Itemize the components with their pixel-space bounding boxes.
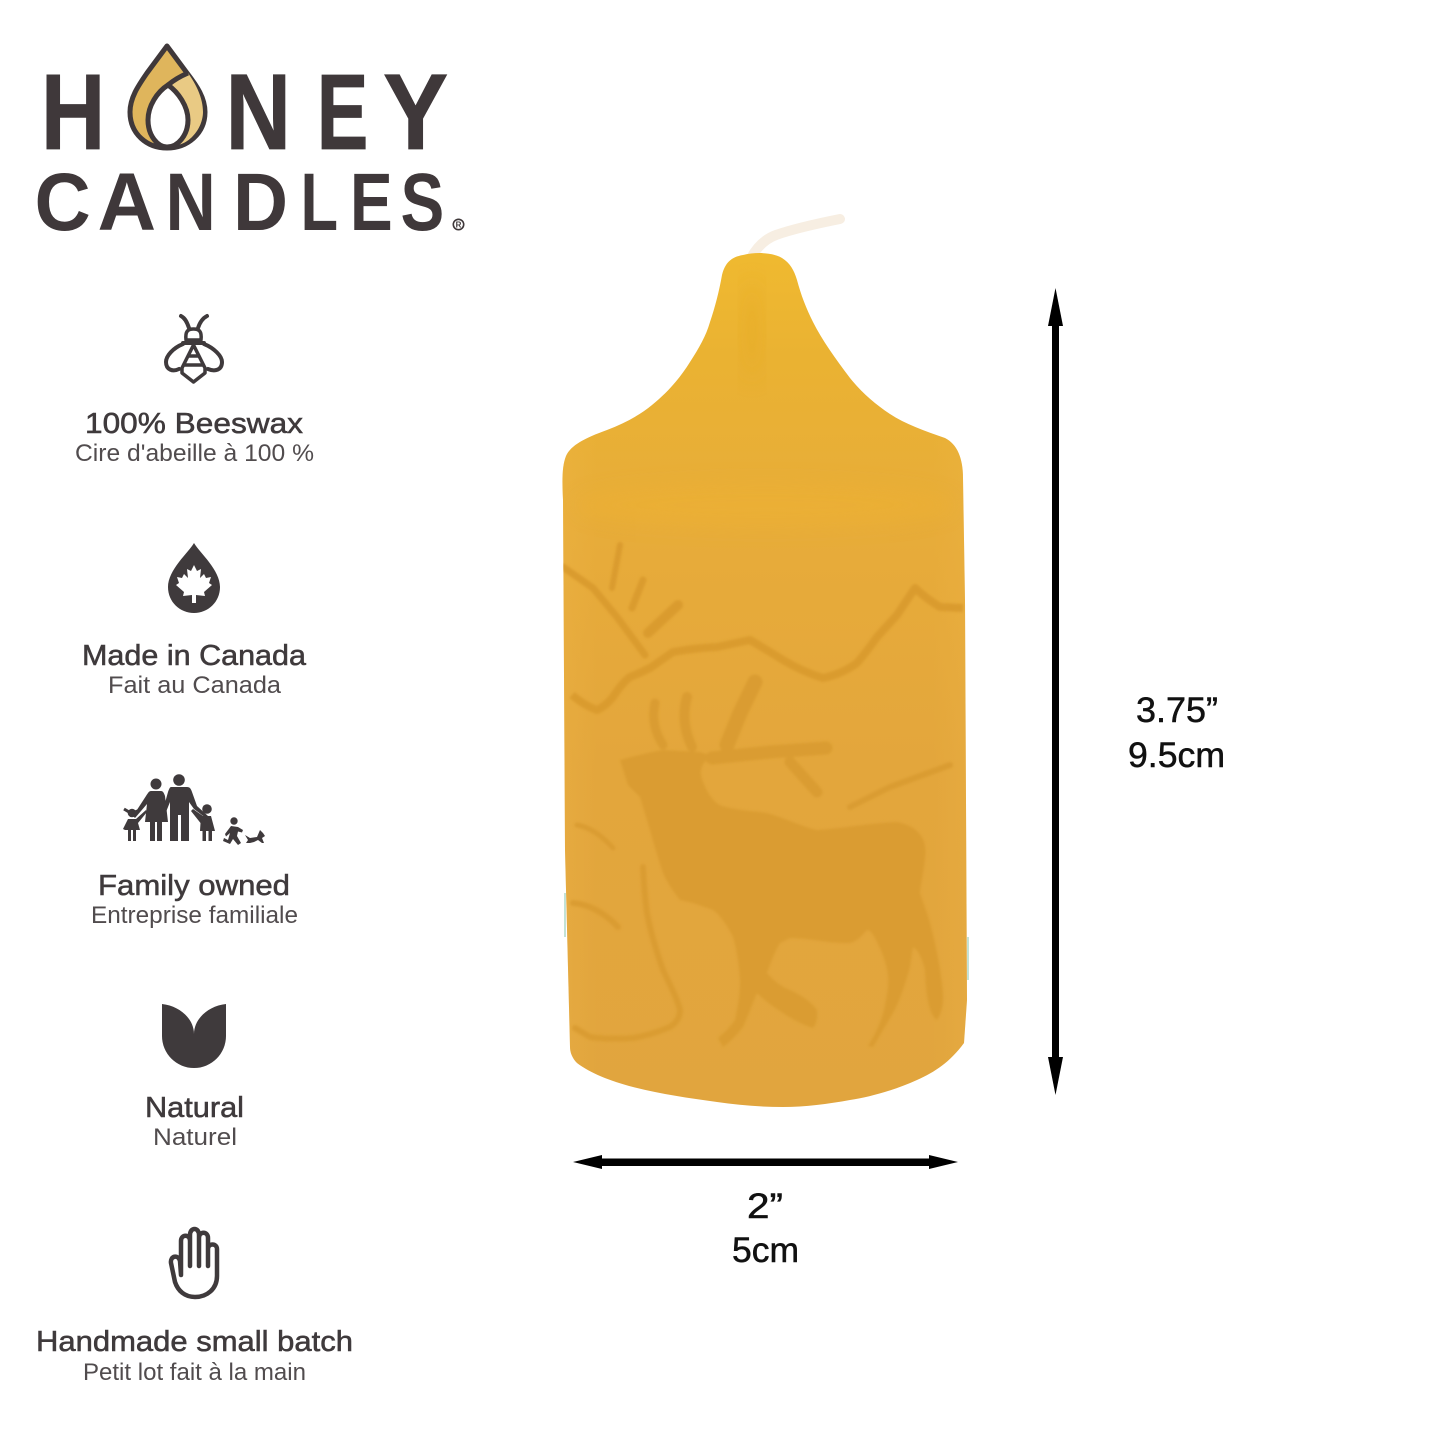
- feature: 100% Beeswax: [75, 316, 314, 467]
- icon: leaf: [162, 1004, 226, 1068]
- subheading: Cire d'abeille à 100 %: [75, 440, 314, 467]
- feature: Family owned: [91, 774, 298, 929]
- logo word: HONEY: H: [41, 52, 105, 172]
- label: width: [732, 1187, 799, 1270]
- logo word: HONEY: E: [317, 51, 368, 172]
- relief: pine branch: [563, 545, 678, 655]
- logo word: HONEY: Y: [383, 52, 448, 172]
- logo word: CANDLES: A: [98, 157, 156, 248]
- icon: hand: [171, 1229, 217, 1297]
- logo: Honey Candles: [34, 46, 464, 248]
- logo word: CANDLES: L: [300, 156, 338, 248]
- candle photo: [550, 219, 980, 1115]
- subheading: Fait au Canada: [108, 672, 282, 699]
- subheading: Petit lot fait à la main: [83, 1359, 306, 1386]
- label: width: 2”: [747, 1187, 783, 1226]
- arrow: height: [1048, 288, 1063, 1095]
- label: height: 9.5cm: [1128, 736, 1225, 775]
- logo word: CANDLES: C: [34, 156, 91, 247]
- feature: Made in Canada: [82, 543, 307, 699]
- relief: mountain ridge: [572, 588, 963, 710]
- heading: Made in Canada: [82, 640, 307, 672]
- registered mark: R: [456, 220, 462, 230]
- logo word: CANDLES: E: [350, 155, 393, 248]
- heading: Family owned: [98, 870, 290, 902]
- logo word: HONEY: N: [226, 53, 291, 173]
- label: width: 5cm: [732, 1231, 799, 1270]
- icon: drop with maple leaf: [168, 543, 220, 613]
- candle wax body: [550, 245, 980, 1115]
- subheading: Entreprise familiale: [91, 902, 298, 929]
- logo word: CANDLES: N: [166, 157, 216, 248]
- heading: Natural: [145, 1092, 244, 1124]
- label: height: 3.75”: [1136, 691, 1218, 730]
- icon: bee: [166, 316, 222, 382]
- relief: small hills: [573, 765, 950, 927]
- arrow: width: [573, 1155, 958, 1169]
- feature: Handmade small batch: [36, 1229, 353, 1386]
- candle wick: [751, 219, 840, 258]
- subheading: Naturel: [153, 1124, 237, 1151]
- heading: 100% Beeswax: [85, 408, 304, 440]
- registered mark: [453, 219, 464, 230]
- logo word: HONEY: [41, 51, 448, 173]
- logo word: CANDLES: S: [400, 156, 444, 248]
- logo word: CANDLES: [34, 155, 444, 248]
- heading: Handmade small batch: [36, 1326, 353, 1358]
- feature: Natural: [145, 1004, 244, 1151]
- logo word: CANDLES: D: [233, 155, 288, 248]
- candle edge tint: [564, 893, 969, 980]
- logo flame icon: [130, 46, 205, 148]
- candle relief: mountains and elk: [563, 545, 963, 1047]
- relief: curved stream: [575, 867, 680, 1039]
- relief: elk: [620, 682, 943, 1047]
- label: height: [1128, 691, 1225, 775]
- icon: family: [123, 774, 265, 845]
